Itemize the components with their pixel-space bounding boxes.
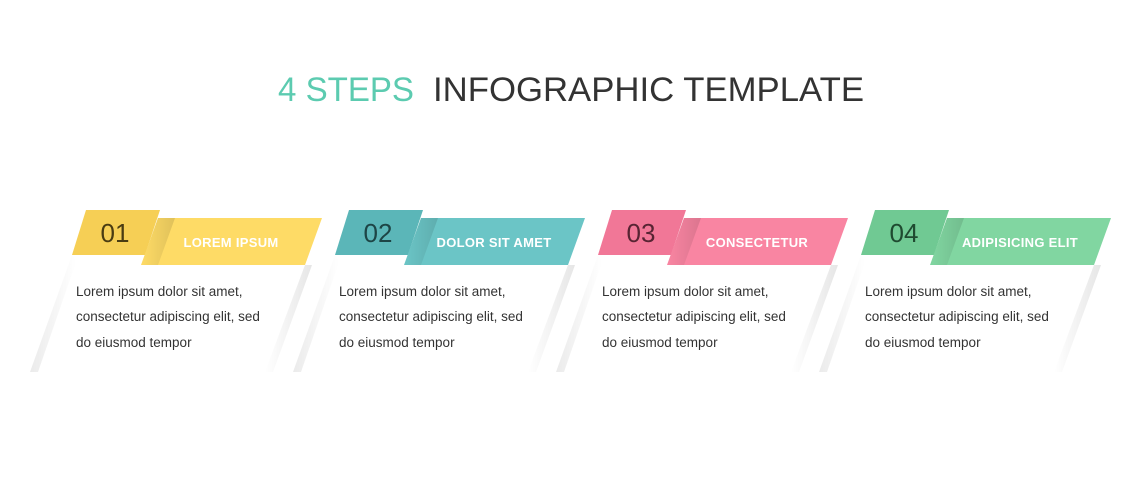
number tab 02 bbox=[335, 210, 423, 255]
text block 01: consectetur adipiscing elit, sed bbox=[76, 309, 260, 324]
text block 02: do eiusmod tempor bbox=[339, 335, 455, 350]
number tab 01 bbox=[72, 210, 160, 255]
title: INFOGRAPHIC TEMPLATE bbox=[433, 71, 864, 109]
number tab 04: 04 bbox=[890, 218, 918, 248]
label band: lorem ipsum bbox=[141, 218, 322, 265]
number tab 04 bbox=[861, 210, 949, 255]
text block 02: consectetur adipiscing elit, sed bbox=[339, 309, 523, 324]
label band: adipisicing elit bbox=[930, 218, 1111, 265]
number tab 03: 03 bbox=[627, 218, 655, 248]
panel: step 04 bbox=[819, 210, 1111, 372]
label band: dolor sit amet bbox=[404, 218, 585, 265]
text block 04 bbox=[865, 284, 1049, 350]
text block 04: consectetur adipiscing elit, sed bbox=[865, 309, 1049, 324]
text block 03 bbox=[602, 284, 786, 350]
text block 03: Lorem ipsum dolor sit amet, bbox=[602, 284, 769, 299]
text block 03: do eiusmod tempor bbox=[602, 335, 718, 350]
panel: step 03 bbox=[556, 210, 848, 372]
text block 02 bbox=[339, 284, 523, 350]
panel: step 02 bbox=[293, 210, 585, 372]
text block 01 bbox=[76, 284, 260, 350]
text block 04: do eiusmod tempor bbox=[865, 335, 981, 350]
text block 02: Lorem ipsum dolor sit amet, bbox=[339, 284, 506, 299]
number tab 01: 01 bbox=[101, 218, 129, 248]
number tab 03 bbox=[598, 210, 686, 255]
label band: lorem ipsum: LOREM IPSUM bbox=[183, 235, 279, 250]
text block 01: do eiusmod tempor bbox=[76, 335, 192, 350]
text block 04: Lorem ipsum dolor sit amet, bbox=[865, 284, 1032, 299]
panel: step 01 bbox=[30, 210, 322, 372]
label band: adipisicing elit: ADIPISICING ELIT bbox=[962, 235, 1078, 250]
text block 03: consectetur adipiscing elit, sed bbox=[602, 309, 786, 324]
label band: consectetur: CONSECTETUR bbox=[706, 235, 808, 250]
label band: consectetur bbox=[667, 218, 848, 265]
label band: dolor sit amet: DOLOR SIT AMET bbox=[437, 235, 551, 250]
text block 01: Lorem ipsum dolor sit amet, bbox=[76, 284, 243, 299]
number tab 02: 02 bbox=[364, 218, 392, 248]
title: 4 STEPS bbox=[278, 71, 414, 109]
